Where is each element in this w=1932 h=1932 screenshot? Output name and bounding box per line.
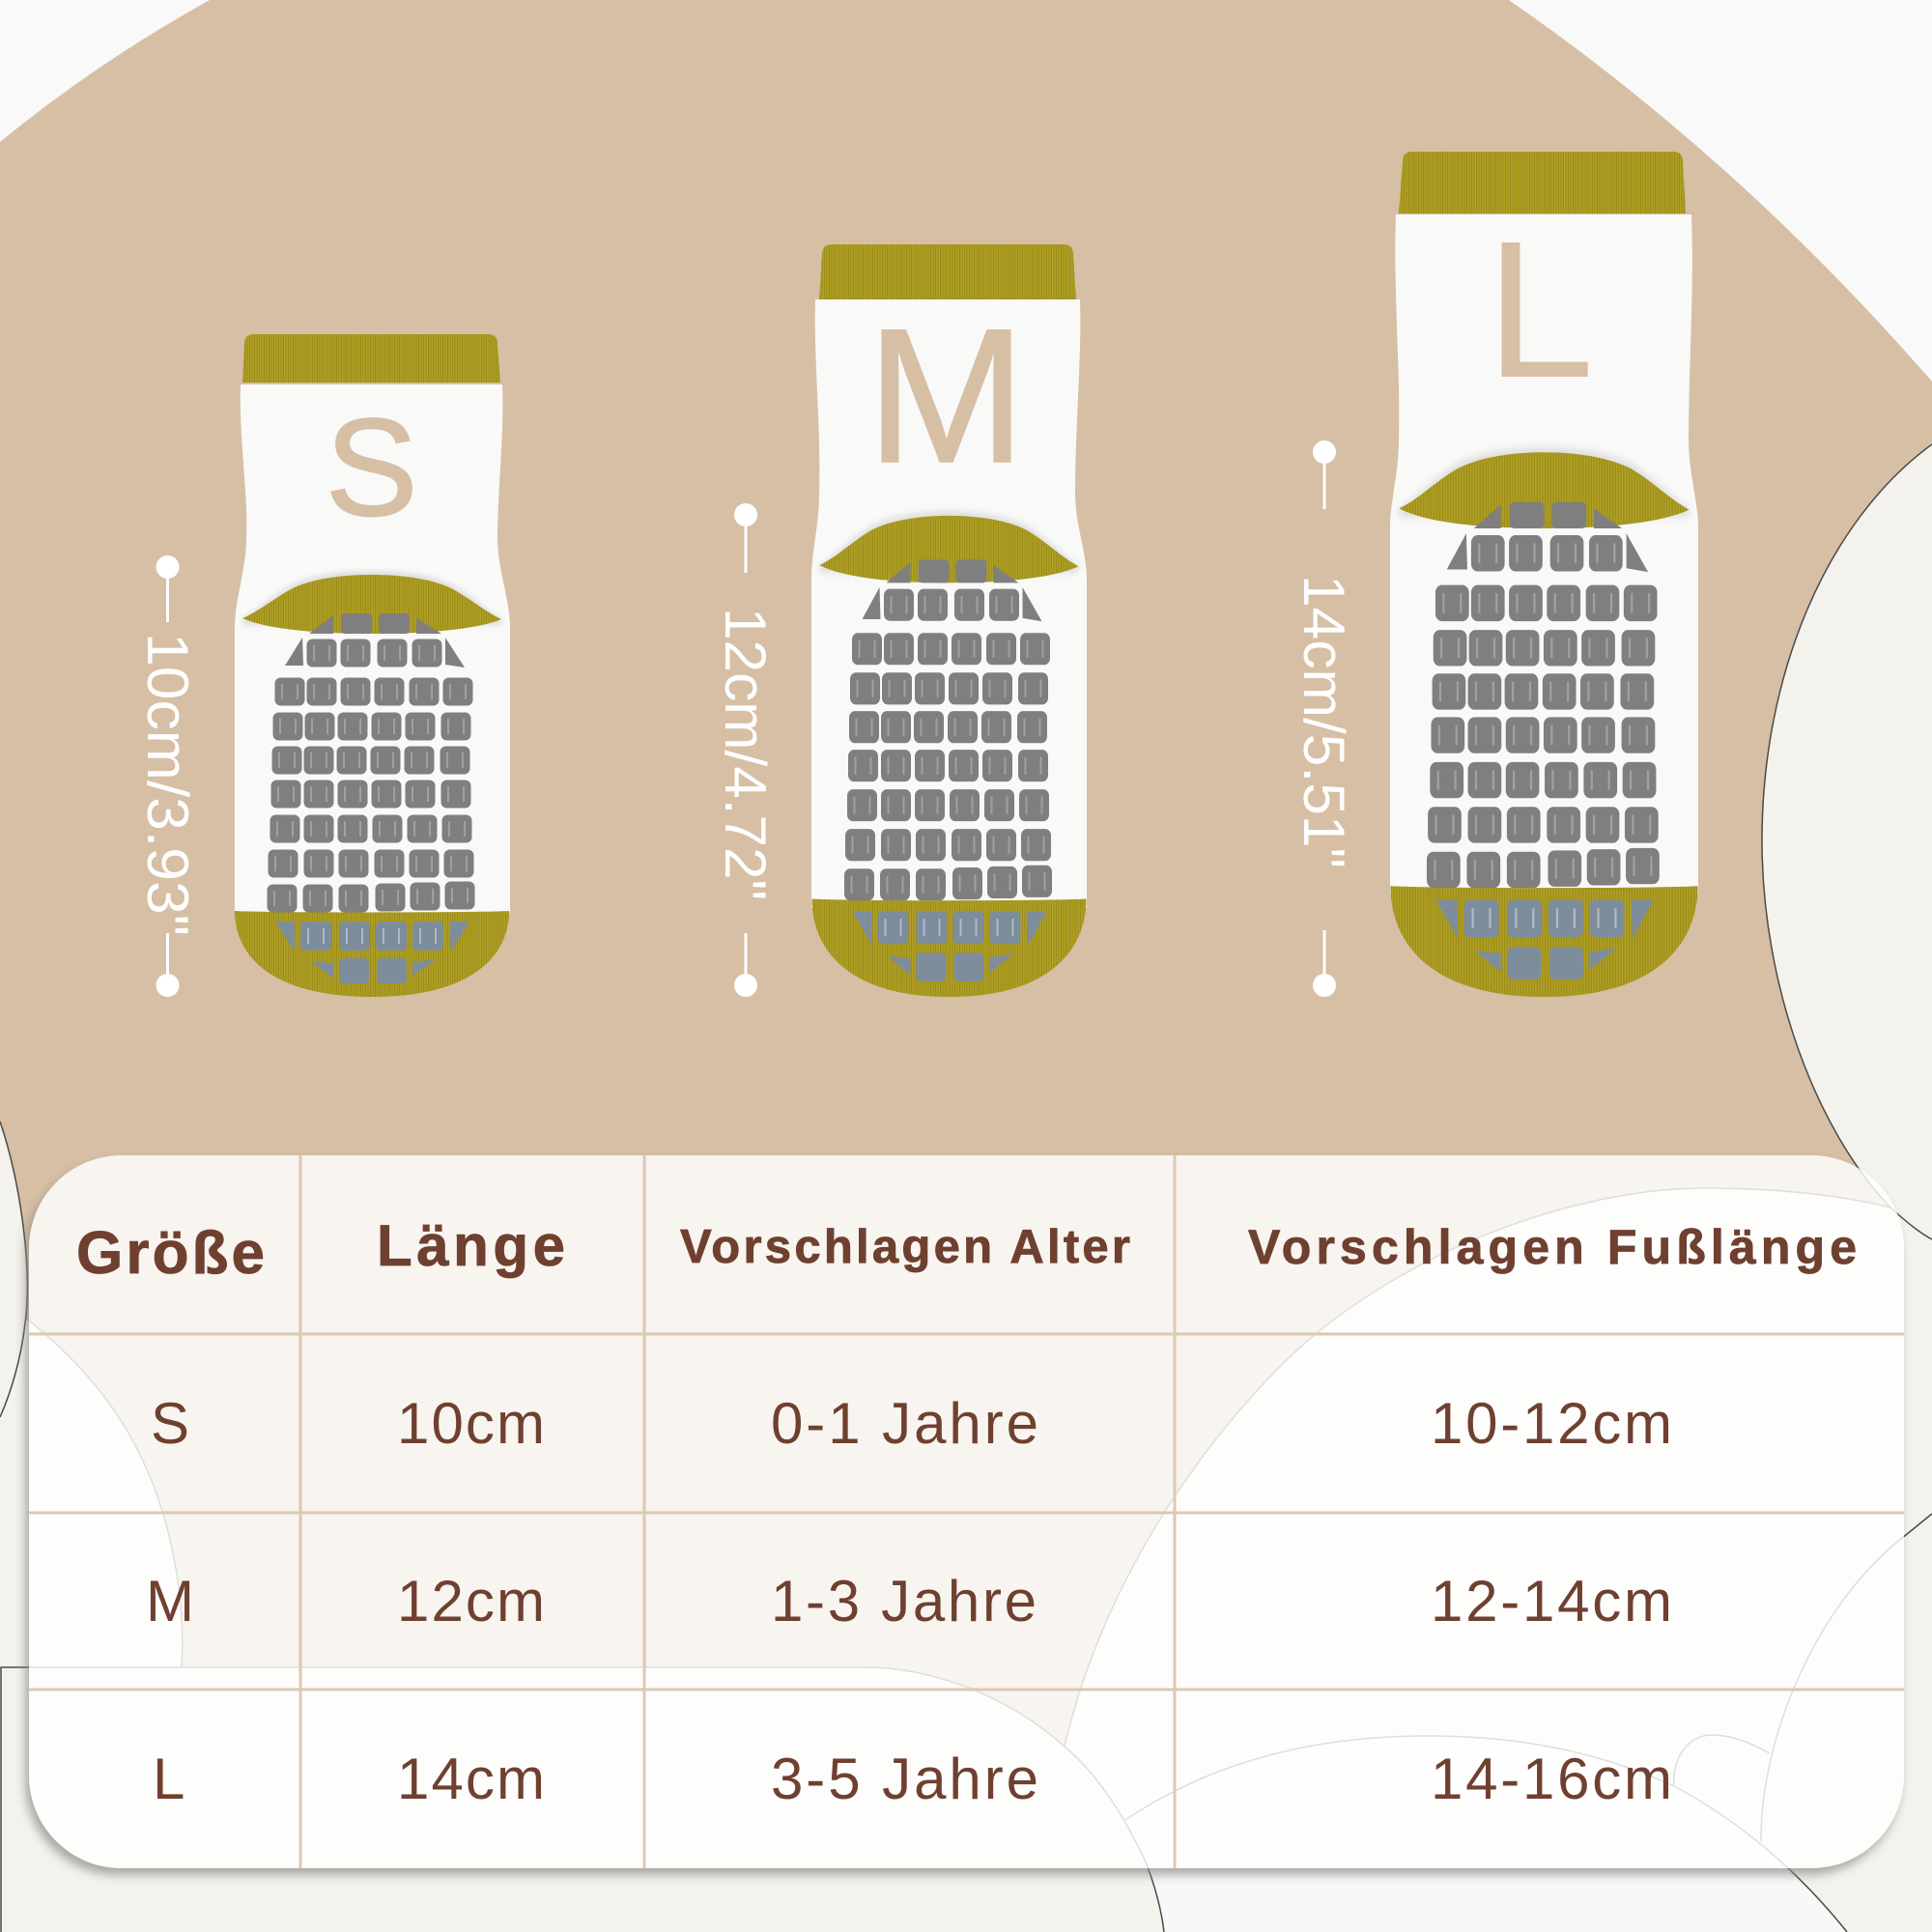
table header row: Vorschlagen Alter — [680, 1221, 1130, 1273]
row M: 12cm — [397, 1569, 545, 1634]
row S: 10-12cm — [1431, 1391, 1672, 1456]
measure M — [713, 503, 778, 997]
row M: M — [146, 1569, 194, 1634]
measure S — [135, 555, 200, 997]
row L: 3-5 Jahre — [771, 1747, 1038, 1811]
measure M label: 12cm/4.72" — [713, 608, 778, 900]
table header row — [76, 1213, 1857, 1287]
sock L cuff — [1399, 152, 1686, 213]
row M: 1-3 Jahre — [771, 1569, 1037, 1634]
sock M sole — [811, 511, 1086, 997]
table header row: Länge — [377, 1213, 565, 1278]
table header row: Größe — [76, 1220, 265, 1287]
row M — [146, 1569, 1672, 1634]
sock M — [811, 244, 1087, 997]
sock L body — [1390, 214, 1698, 894]
table panel — [29, 1155, 1904, 1868]
row S: 10cm — [397, 1391, 545, 1456]
sock L sole — [1390, 447, 1698, 997]
row L: 14cm — [397, 1747, 545, 1811]
table header row: Vorschlagen Fußlänge — [1248, 1220, 1857, 1274]
sock L letter: L — [1486, 200, 1594, 418]
row S: S — [151, 1391, 189, 1456]
row M: 12-14cm — [1431, 1569, 1672, 1634]
sock M letter: M — [867, 289, 1026, 502]
measure L label: 14cm/5.51" — [1292, 575, 1356, 868]
row S: 0-1 Jahre — [771, 1391, 1038, 1456]
bottom light circle — [1125, 1736, 1847, 1932]
sock S — [235, 334, 510, 997]
table shadow — [25, 1162, 1900, 1875]
row L — [153, 1747, 1672, 1811]
table grid — [29, 1155, 1904, 1868]
sock S sole — [235, 571, 509, 997]
row L: 14-16cm — [1431, 1747, 1672, 1811]
measure S label: 10cm/3.93" — [135, 633, 200, 936]
sock S body — [235, 384, 510, 913]
row L: L — [153, 1747, 185, 1811]
sock S cuff — [242, 334, 500, 383]
measure L — [1292, 440, 1356, 997]
background outlines — [0, 444, 1932, 1932]
sock M body — [811, 299, 1087, 908]
size table — [29, 1155, 1904, 1868]
row S — [151, 1391, 1672, 1456]
sock M cuff — [819, 244, 1076, 299]
sock S letter: S — [326, 391, 417, 545]
sock L — [1390, 152, 1698, 997]
